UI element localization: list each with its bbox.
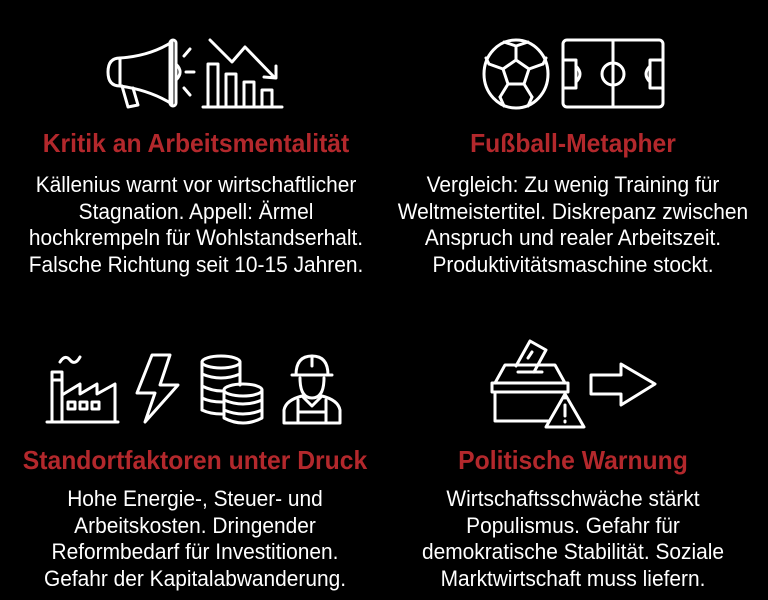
panel: Standortfaktoren unter Druck: [23, 445, 368, 590]
heading: Kritik an Arbeitsmentalität: [43, 128, 349, 158]
icon: falling bar chart: [203, 40, 282, 107]
heading: Politische Warnung: [458, 445, 688, 475]
text block: Källenius warnt vor wirtschaftlicher: [36, 172, 356, 197]
text block: [398, 172, 748, 276]
heading: Standortfaktoren unter Druck: [23, 445, 367, 475]
text block: [422, 486, 724, 590]
text block: Reformbedarf für Investitionen.: [52, 539, 338, 564]
icon: lightning: [137, 355, 178, 422]
text block: Hohe Energie-, Steuer- und: [67, 486, 323, 511]
text block: Stagnation. Appell: Ärmel: [79, 198, 313, 224]
icon: ballot box with warning: [492, 341, 584, 427]
icon: coins: [202, 356, 262, 423]
text block: hochkrempeln für Wohlstandserhalt.: [29, 225, 363, 250]
icon: arrow right: [591, 364, 655, 405]
text block: Populismus. Gefahr für: [466, 512, 680, 538]
icon: worker: [284, 356, 340, 423]
text block: Marktwirtschaft muss liefern.: [441, 566, 705, 590]
text block: Produktivitätsmaschine stockt.: [432, 252, 714, 276]
text block: demokratische Stabilität. Soziale: [422, 539, 724, 564]
panel: Fußball-Metapher: [398, 128, 748, 276]
text block: Weltmeistertitel. Diskrepanz zwischen: [398, 198, 748, 224]
panel: Kritik an Arbeitsmentalität: [29, 128, 363, 276]
text block: Anspruch und realer Arbeitszeit.: [425, 225, 721, 250]
icon: football pitch: [563, 40, 663, 107]
text block: Falsche Richtung seit 10-15 Jahren.: [29, 252, 363, 276]
text block: Gefahr der Kapitalabwanderung.: [44, 566, 346, 590]
panel: Politische Warnung: [422, 445, 724, 590]
text block: Wirtschaftsschwäche stärkt: [446, 486, 700, 511]
heading: Fußball-Metapher: [470, 128, 676, 158]
icon: megaphone: [108, 40, 194, 107]
text block: Arbeitskosten. Dringender: [74, 512, 316, 538]
icon: factory: [47, 357, 118, 422]
text block: Vergleich: Zu wenig Training für: [427, 172, 719, 197]
text block: [29, 172, 363, 276]
text block: [44, 486, 346, 590]
icon: football: [484, 40, 548, 108]
